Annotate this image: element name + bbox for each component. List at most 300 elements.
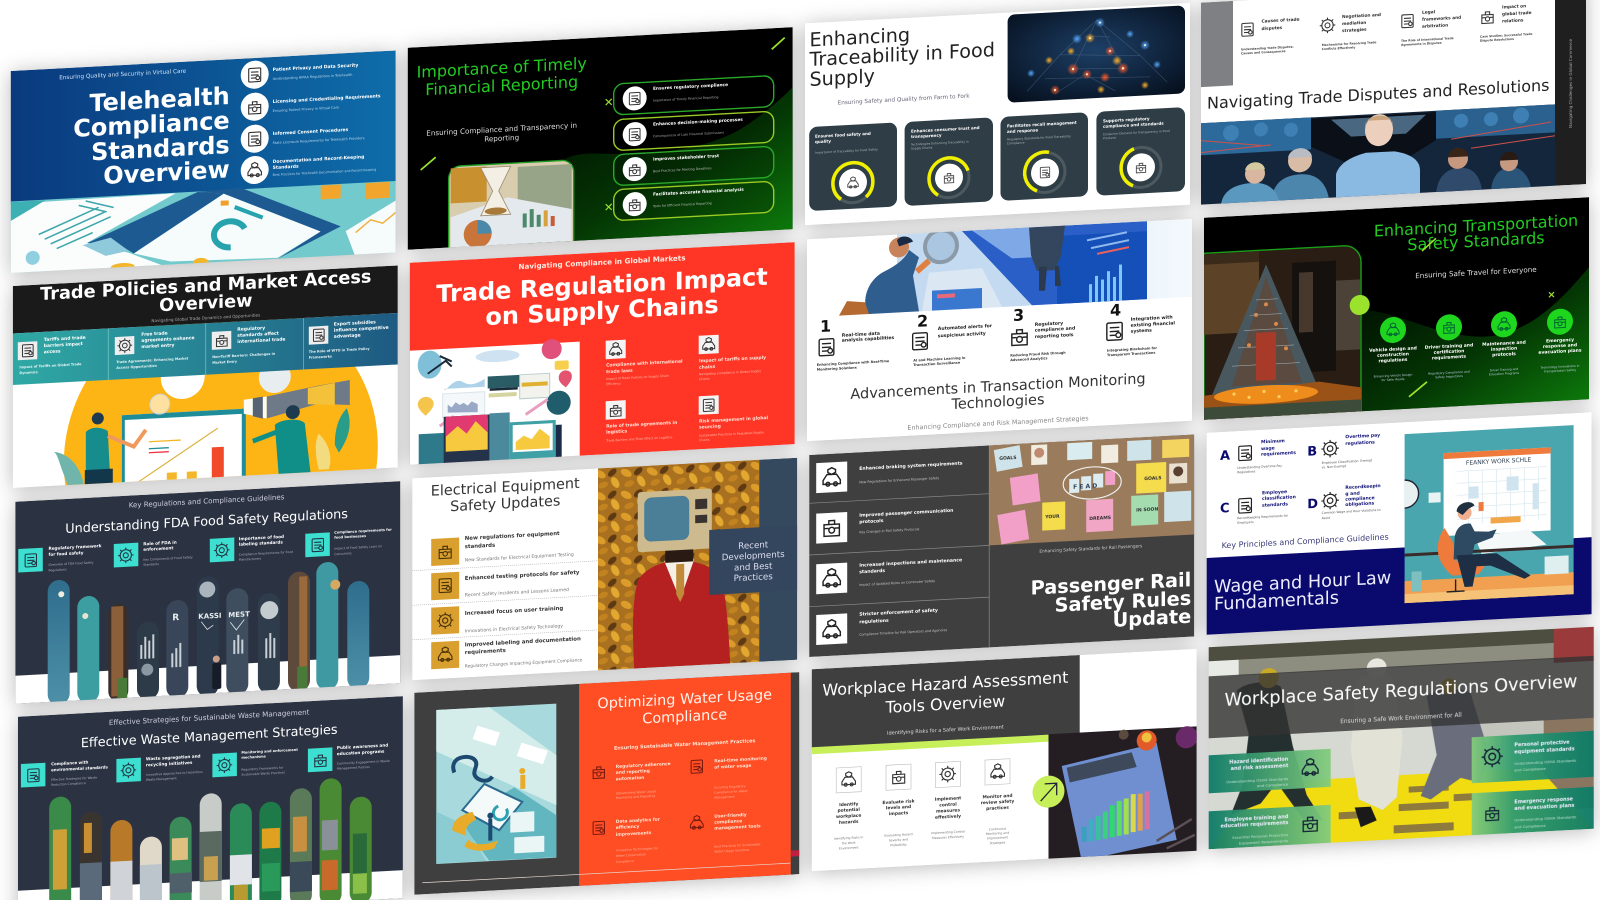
item: data analytics: improvements — [616, 830, 652, 838]
item: real-time monitoring: of water usage — [714, 763, 751, 771]
illustration: team with telescope — [54, 318, 378, 486]
item: emergency response: Emergency response — [1514, 796, 1574, 805]
item: evaluate risk: Evaluate risk — [882, 798, 915, 806]
item A: minimum wage — [1220, 438, 1296, 475]
item: user training: Innovations in Electrical Safety Technology — [465, 623, 563, 634]
item: segregation: Waste segregation and — [146, 753, 201, 761]
item: informed consent: State Licensure Requirements for Telehealth Providers — [273, 136, 365, 145]
photo: workers on yellow floor — [1209, 627, 1594, 849]
item: equipment standards: New Standards for Electrical Equipment Testing — [465, 552, 574, 563]
item C: employee classification: standards — [1262, 501, 1288, 509]
item: labeling and documentation: Improved labeling and documentation — [465, 636, 581, 648]
card: food safety — [809, 122, 897, 211]
illustration: employee at schedule board — [1405, 425, 1575, 603]
green wave background — [523, 87, 793, 247]
subtitle: Navigating Compliance in Global Markets — [518, 253, 686, 271]
title: Safety Standards — [1407, 228, 1545, 254]
item: driver training: certification — [1434, 348, 1464, 356]
item: real-time monitoring: Compliance for Water — [714, 789, 749, 795]
item: regulatory standards — [212, 324, 286, 365]
step 3 — [1010, 303, 1075, 362]
callout: recent developments: Developments — [722, 550, 785, 563]
step 1: Real-time data — [842, 331, 880, 339]
item: personal protective equipment: Personal protective — [1514, 740, 1570, 749]
image: TV-headed figure in leaves — [598, 460, 759, 670]
item A: minimum wage: Understanding Overtime Pay — [1237, 464, 1282, 470]
arrow badge — [1032, 775, 1064, 809]
item: regulatory standards: Market Entry — [212, 360, 238, 365]
item: testing protocols: Recent Safety Incidents and Lessons Learned — [465, 587, 569, 598]
item: real-time monitoring: Real-time monitoring — [714, 756, 767, 764]
item: segregation: Innovative Approaches to Hazardous — [146, 770, 203, 777]
item: environmental standards: Reduction Compliance — [51, 781, 86, 787]
item: vehicle design: for Safer Roads — [1382, 377, 1405, 382]
item: tariffs: Impact of Tariffs on Global Trade — [19, 362, 82, 369]
item: communication: Key Changes in Rail Safety Protocols — [859, 527, 920, 534]
title: Update — [1113, 605, 1191, 632]
header band — [13, 265, 398, 334]
item B: overtime pay — [1307, 432, 1380, 470]
item: stakeholder trust: Improves stakeholder trust — [653, 153, 719, 163]
item: international trade laws: Compliance with international — [606, 359, 683, 369]
item: identify hazards: potential — [837, 807, 860, 814]
item: compliance requirements: Consumers — [334, 551, 352, 556]
image: hourglass — [448, 160, 574, 248]
title: Trade Regulation Impact — [436, 263, 768, 308]
item: negotiation: strategies — [1342, 27, 1367, 34]
item: role of FDA — [114, 539, 193, 568]
item: negotiation — [1320, 12, 1381, 51]
item: evaluate risk — [882, 764, 915, 848]
item: monitor and review: Monitor and — [982, 793, 1013, 800]
item: legal frameworks: Agreements in Disputes — [1401, 41, 1442, 47]
item: monitoring: Sustainable Waste Practices — [241, 770, 285, 777]
item: global relations: global trade — [1502, 10, 1532, 18]
panel: Wage and Hour Law Fundamentals — [1207, 412, 1592, 635]
item B: overtime pay: Employee Classification: Exempt — [1322, 458, 1373, 465]
image: glowing network — [1008, 5, 1185, 103]
item: global relations: Impact on — [1502, 3, 1526, 11]
item: role of FDA: Standards — [143, 562, 159, 567]
item: enforcement: Compliance Timeline for Rail Operators and Agencies — [859, 628, 947, 637]
callout: recent developments: Practices — [734, 572, 773, 584]
title: Enhancing — [809, 23, 910, 52]
item: trade agreements: Free trade — [141, 330, 168, 338]
item: communication: protocols — [859, 518, 884, 525]
item: tariffs on supply chains — [699, 332, 766, 381]
item: international trade laws: Impact of Trade Policies on Supply Chain — [606, 374, 669, 381]
step 3: Advanced Analytics — [1010, 356, 1048, 362]
item: trade agreements in logistics: Role of trade agreements in — [606, 420, 677, 430]
callout: recent developments: Recent — [738, 540, 769, 552]
card: food safety: quality — [815, 138, 831, 144]
item: management tools: Water Usage Solutions — [714, 848, 750, 854]
item: regulatory standards: standards affect — [237, 331, 280, 339]
item: tariffs: Dynamics — [19, 370, 38, 375]
item: braking — [816, 455, 963, 493]
item D: recordkeeping: D — [1307, 497, 1318, 512]
item: control measures: Measures Effectively — [932, 834, 964, 840]
item B: overtime pay: vs. Non-Exempt — [1322, 464, 1347, 469]
card: food safety: Ensures food safety and — [815, 131, 871, 139]
item B: overtime pay: Overtime pay — [1345, 432, 1380, 440]
item: legal frameworks: arbitration — [1422, 22, 1448, 30]
item: public awareness: Public awareness and — [337, 742, 388, 750]
item: monitor and review: Strategies — [990, 840, 1006, 845]
item: regulatory compliance: Importance of Timely Financial Reporting — [653, 95, 718, 103]
item: compliance requirements: Compliance requirements for — [334, 528, 392, 535]
item: regulatory framework — [18, 543, 102, 574]
title: Financial Reporting — [425, 72, 578, 99]
item: decision making — [614, 111, 774, 151]
item: monitor and review — [981, 758, 1014, 846]
item: informed consent: Informed Consent Procedures — [273, 127, 349, 137]
title: Trade Policies and Market Access — [40, 267, 371, 305]
item: monitor and review: Monitoring and — [986, 831, 1009, 836]
item: monitoring — [212, 748, 298, 778]
item: emergency response: Emergency — [1546, 337, 1574, 344]
panel: Workplace Hazard Assessment Tools Overview — [812, 649, 1198, 875]
subtitle: Ensuring Safety and Quality from Farm to Fork — [838, 93, 970, 107]
item: role of FDA: Key Components of Food Safety — [143, 555, 193, 562]
item: tariffs — [18, 335, 86, 375]
step 2: Automated alerts for — [938, 323, 993, 332]
item: user training: Increased focus on user training — [465, 606, 563, 617]
title: Fundamentals — [1214, 588, 1339, 615]
item: evaluate risk: impacts — [889, 810, 909, 817]
step 3: Reducing Fraud Risk through — [1010, 351, 1066, 358]
item: tariffs: access — [44, 349, 61, 355]
item: international trade laws — [606, 337, 683, 386]
item: food labeling: Importance of food — [239, 534, 284, 541]
item: enforcement: Stricter enforcement of safety — [859, 608, 938, 618]
item: control measures: measures — [936, 807, 960, 815]
item: braking: Enhanced braking system requirements — [859, 461, 963, 472]
item: legal frameworks: frameworks and — [1422, 15, 1461, 23]
item C: employee classification: Employee — [1262, 489, 1287, 496]
card: regulatory compliance: Products — [1103, 136, 1116, 140]
item: evaluate risk: Severity and — [889, 837, 908, 842]
item: control measures: Implementing Control — [931, 829, 965, 835]
item: maintenance: Maintenance and — [1482, 340, 1526, 348]
item: accurate analysis: Tools for Efficient Financial Reporting — [652, 201, 712, 208]
step 3: reporting tools — [1035, 332, 1074, 340]
item: monitor and review: Continuous — [989, 827, 1007, 831]
item: negotiation: Conflicts Effectively — [1322, 45, 1355, 51]
item: regulatory standards: Non-Tariff Barriers: Challenges in — [212, 352, 276, 359]
step 2 — [913, 308, 993, 367]
item: management tools: management tools — [714, 823, 761, 832]
panel: Enhancing Traceability in Food Supply — [805, 3, 1190, 225]
title: Advancements in Transaction Monitoring — [850, 371, 1146, 403]
item: informed consent — [240, 124, 364, 153]
item: export subsidies: Export subsidies — [334, 319, 376, 328]
item: documentation — [240, 155, 376, 184]
item: control measures: effectively — [935, 813, 961, 821]
item: labeling and documentation: Regulatory Changes Impacting Equipment Compliance — [465, 657, 583, 669]
step 4: systems — [1131, 328, 1152, 335]
image: corkboard with sticky notes: GOALS — [999, 455, 1017, 462]
item: risk management — [699, 393, 769, 442]
item: identify hazards: workplace — [836, 813, 861, 820]
callout: recent developments: and Best — [734, 562, 773, 574]
title: Standards — [91, 131, 230, 166]
item: driver training: Regulatory Compliance and — [1428, 370, 1470, 376]
item: user training — [431, 601, 563, 636]
item: regulatory standards: international trade — [237, 336, 286, 345]
step 4: Transparent Transactions — [1107, 351, 1155, 357]
item: data analytics: Data analytics for — [616, 817, 661, 825]
callout: recent developments — [709, 525, 797, 595]
item: vehicle design: Enhancing Vehicle Design — [1374, 373, 1412, 379]
item: inspections: Impact of Updated Rules on Commuter Safety — [859, 579, 935, 587]
item: tariffs: barriers impact — [44, 341, 84, 349]
item: hazard identification: Hazard identification — [1229, 757, 1289, 766]
illustration: supply chain collage — [410, 338, 580, 466]
title: Telehealth — [89, 82, 230, 117]
subtitle: Ensuring Sustainable Water Management Practices — [614, 738, 755, 752]
panel: Passenger Rail Safety Rules Update — [809, 434, 1194, 657]
item: vehicle design: Vehicle design and — [1369, 345, 1417, 354]
item: management tools: Best Practices for Sustainable — [714, 842, 760, 849]
step 4: existing financial — [1131, 320, 1175, 329]
item: emergency response: Understanding OSHA Standards — [1514, 814, 1576, 823]
item: patient privacy — [240, 60, 358, 89]
item: international trade laws: Efficiency — [606, 381, 621, 386]
item: inspections: Increased inspections and maintenance — [859, 557, 962, 569]
panel: Understanding FDA Food Safety Regulations — [15, 481, 400, 707]
item: data analytics: efficiency — [616, 824, 639, 831]
item: patient privacy: Patient Privacy and Data Security — [273, 62, 358, 73]
title: Enhancing Transportation — [1374, 211, 1578, 241]
item: risk management: Chains — [699, 438, 710, 442]
title: Overview — [103, 155, 230, 190]
item: export subsidies: Frameworks — [309, 354, 332, 360]
item: emergency response: and evacuation plans — [1514, 803, 1574, 812]
item: legal frameworks: The Role of International Trade — [1401, 36, 1454, 43]
item: reporting automation: Monitoring and Reporting — [616, 794, 655, 800]
item D: recordkeeping: obligations — [1345, 500, 1374, 508]
item: documentation: Standards — [273, 164, 299, 171]
item: trade agreements in logistics: logistics — [606, 428, 628, 436]
subtitle: Key Regulations and Compliance Guidelines — [129, 492, 285, 510]
item: segregation — [116, 753, 203, 783]
item: negotiation: Mechanisms for Resolving Trade — [1322, 40, 1376, 47]
item: equipment standards: standards — [465, 543, 495, 550]
item: accurate analysis: Facilitates accurate financial analysis — [653, 187, 744, 198]
item: management tools — [690, 811, 761, 855]
item: monitoring: mechanisms — [241, 754, 266, 760]
item: employee training: education requirements — [1221, 820, 1288, 829]
item: monitor and review: practices — [986, 805, 1009, 812]
title: Safety Rules — [1055, 587, 1191, 617]
item: real-time monitoring: Ensuring Regulatory — [714, 784, 746, 790]
green wave background — [1354, 267, 1589, 415]
title: Compliance — [73, 107, 230, 143]
item: driver training — [1425, 313, 1473, 380]
illustration: arches with recycling scene — [49, 776, 372, 900]
item: decision making: Consequences of Late Financial Submissions — [653, 131, 724, 138]
item: trade agreements: agreements enhance — [141, 335, 195, 344]
illustration: arches with data imagery: MEST — [228, 610, 250, 619]
item: monitoring: Regulatory Frameworks for — [241, 766, 284, 772]
item: environmental standards: Effective Strategies for Waste — [51, 775, 97, 782]
item A: minimum wage: A — [1220, 448, 1230, 464]
illustration: analyst with magnifier — [839, 217, 1192, 316]
item: emergency response — [1538, 308, 1582, 374]
step 3: 3 — [1013, 305, 1024, 325]
item: food labeling: Compliance Requirements for Food — [239, 550, 293, 557]
item: control measures: control — [939, 802, 957, 809]
item: compliance requirements: food businesses — [334, 534, 366, 540]
item: regulatory compliance — [614, 75, 774, 115]
panel: Telehealth Compliance Standards Overview — [11, 50, 396, 278]
item: enforcement: regulations — [859, 618, 889, 625]
item: public awareness: Management Policies — [337, 765, 370, 771]
item: employee training — [1209, 805, 1331, 849]
item: maintenance: Driver Training and — [1490, 367, 1518, 372]
item: management tools: User-friendly — [714, 812, 747, 820]
item A: minimum wage: Minimum — [1261, 438, 1285, 445]
image: corkboard with sticky notes — [989, 434, 1194, 545]
item: emergency response: evacuation plans — [1538, 348, 1582, 356]
item: legal frameworks: Legal — [1422, 9, 1436, 16]
item: regulatory framework: Regulatory framework — [48, 543, 102, 551]
item D: recordkeeping: Common Wage and Hour Violations to — [1322, 508, 1381, 515]
illustration: arches with data imagery: R — [172, 613, 179, 623]
item: trade agreements: Access Opportunities — [116, 364, 157, 370]
panel: Enhancing Transportation Safety Standards — [1204, 197, 1589, 424]
item: role of FDA: Role of FDA in — [143, 540, 177, 546]
item: data analytics: Innovative Technologies for — [616, 846, 659, 852]
item: tariffs: Tariffs and trade — [44, 335, 86, 343]
item: environmental standards: Compliance with — [51, 759, 89, 766]
step 1: analysis capabilities — [842, 335, 895, 344]
subtitle: Ensuring Safe Travel for Everyone — [1415, 265, 1537, 280]
vertical caption: Navigating Challenges in Global Commerce — [1568, 38, 1573, 128]
item: reporting automation: automation — [616, 775, 644, 782]
item: employee training: Employee training and — [1225, 814, 1289, 824]
item: licensing: Licensing and Credentialing Requirements — [273, 93, 381, 105]
card: consumer trust: Technologies Enhancing Traceability in — [910, 140, 969, 147]
item: evaluate risk: levels and — [886, 804, 911, 811]
item: public awareness — [308, 742, 390, 772]
item: evaluate risk: Evaluating Hazard — [884, 832, 913, 838]
item: role of FDA: enforcement — [143, 545, 173, 552]
item C: employee classification: Recordkeeping Requirements for — [1237, 514, 1289, 520]
title: Compliance — [642, 707, 727, 728]
item: personal protective equipment — [1472, 731, 1594, 783]
item: regulatory framework: Regulations — [48, 567, 67, 572]
image: tablet with charts — [1048, 726, 1198, 863]
panel: Advancements in Transaction Monitoring Technologies — [807, 217, 1192, 441]
image: corkboard with sticky notes: GOALS — [1144, 475, 1162, 482]
panel: Workplace Safety Regulations Overview — [1209, 627, 1594, 849]
item: causes: Causes and Consequences — [1241, 49, 1286, 55]
item D: recordkeeping: Avoid — [1322, 516, 1330, 520]
item: personal protective equipment: equipment standards — [1514, 746, 1575, 755]
item: maintenance: Education Programs — [1489, 371, 1519, 377]
subtitle: Identifying Risks for a Safer Work Environment — [887, 724, 1004, 737]
panel: Trade Policies and Market Access Overview — [12, 266, 398, 488]
illustration: tablet and documents — [11, 179, 396, 278]
item: enforcement — [816, 607, 947, 645]
item: testing protocols: Enhanced testing protocols for safety — [465, 570, 580, 582]
item: inspections: standards — [859, 568, 885, 575]
item A: minimum wage: requirements — [1261, 450, 1296, 458]
step 3: compliance and — [1035, 326, 1075, 334]
item: stakeholder trust — [614, 146, 774, 186]
item: segregation: recycling initiatives — [146, 760, 193, 767]
item: data analytics — [593, 817, 661, 865]
item: identify hazards: Environment — [839, 845, 859, 851]
subtitle: Enhancing Compliance and Risk Management Strategies — [907, 414, 1089, 432]
card: consumer trust: transparency — [911, 133, 942, 139]
item: real-time monitoring — [691, 756, 767, 801]
item D: recordkeeping: g and — [1345, 491, 1360, 497]
accent marks — [772, 38, 785, 49]
card: consumer trust: Enhances consumer trust and — [911, 125, 980, 134]
title: Understanding FDA Food Safety Regulations — [65, 507, 348, 537]
item: public awareness: education programs — [337, 749, 385, 756]
subtitle: Navigating Global Trade Dynamics and Opportunities — [151, 312, 260, 323]
panel: Trade Regulation Impact on Supply Chains — [410, 242, 795, 466]
item: equipment standards — [431, 530, 574, 566]
item: monitoring: Monitoring and enforcement — [241, 748, 298, 755]
image: corkboard with sticky notes: F E A D — [1073, 483, 1097, 491]
item: identify hazards: the Work — [842, 841, 856, 845]
card: food safety: Importance of Traceability for Food Safety — [815, 147, 878, 155]
item: trade agreements — [115, 329, 195, 370]
item: segregation: Waste Management — [146, 776, 178, 782]
item: documentation: Best Practices for Telehealth Documentation and Record Keeping — [273, 168, 376, 177]
item: legal frameworks — [1401, 8, 1461, 47]
item: negotiation: Negotiation and — [1342, 12, 1381, 20]
item: international trade laws: trade laws — [606, 368, 633, 375]
item B: overtime pay: regulations — [1345, 439, 1375, 447]
step 4: Integrating Blockchain for — [1107, 346, 1157, 353]
title: Workplace Safety Regulations Overview — [1225, 672, 1577, 711]
card: regulatory compliance — [1096, 107, 1185, 196]
item: emergency response — [1472, 787, 1594, 835]
title: Technologies — [950, 392, 1045, 413]
item: global relations: Dispute Resolutions — [1480, 37, 1514, 43]
item: personal protective equipment: Understanding OSHA Standards — [1514, 758, 1576, 766]
item: export subsidies: The Role of WTO in Trade Policy — [309, 347, 370, 354]
image: people at digital screens — [1201, 104, 1555, 206]
item D: recordkeeping — [1307, 483, 1381, 521]
item: driver training: requirements — [1432, 354, 1466, 362]
item: environmental standards — [21, 758, 109, 789]
step 1: 1 — [820, 316, 831, 336]
step 2: suspicious activity — [938, 331, 986, 339]
item: decision making: Enhances decision-making processes — [653, 117, 743, 128]
step 4: 4 — [1110, 300, 1121, 320]
item: export subsidies: advantage — [334, 332, 361, 340]
item: stakeholder trust: Best Practices for Meeting Deadlines — [653, 166, 712, 173]
item: data analytics: Compliance — [616, 859, 634, 864]
item: licensing: Ensuring Patient Privacy in Virtual Care — [273, 106, 339, 113]
item: vehicle design: regulations — [1379, 357, 1408, 364]
item: maintenance — [1482, 310, 1526, 377]
item: global relations: Case Studies: Successful Trade — [1480, 32, 1532, 39]
item: hazard identification: Understanding OSHA Standards — [1226, 776, 1288, 784]
step 2: AI and Machine Learning in — [913, 356, 966, 363]
item: evaluate risk: Probability — [890, 843, 907, 847]
illustration: compliance isometric — [436, 704, 556, 864]
item: identify hazards: Identify — [839, 801, 858, 808]
item: food labeling: Manufacturers — [239, 557, 262, 562]
